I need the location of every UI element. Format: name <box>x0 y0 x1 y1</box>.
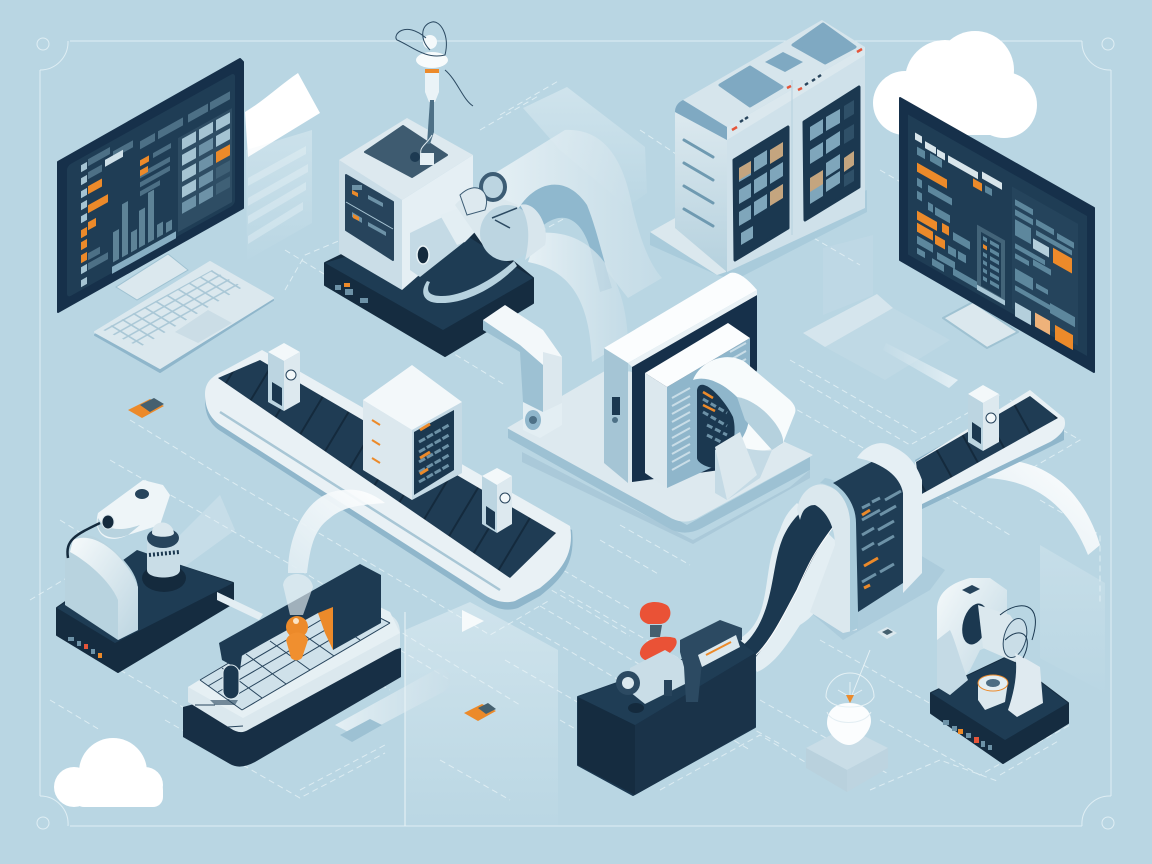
conveyor server <box>363 365 462 500</box>
right monitor <box>900 98 1094 372</box>
top centre machine <box>325 118 546 356</box>
dashed circuit paths <box>30 80 1100 800</box>
gantry <box>219 564 381 670</box>
scanner screen <box>697 385 735 470</box>
floating glass panel, right <box>803 235 958 388</box>
left monitor <box>58 59 243 312</box>
left conveyor <box>205 350 573 610</box>
machine body <box>339 160 402 290</box>
scanner arch <box>693 357 795 450</box>
cloud: top right <box>873 31 1037 138</box>
keyboard <box>95 262 273 372</box>
curved ramp <box>737 503 840 672</box>
machine base <box>325 205 533 356</box>
conveyor robots <box>268 343 512 533</box>
L-shaped arm <box>483 305 562 438</box>
side cylinder <box>410 212 463 277</box>
right conveyor with gate <box>737 385 1065 672</box>
small chips <box>128 398 897 742</box>
monitor stand <box>943 302 1018 348</box>
gate arches <box>797 484 857 633</box>
curved ribbon <box>288 490 385 573</box>
server base <box>650 190 867 280</box>
bottom right machine <box>931 578 1068 763</box>
3D printer bed <box>183 490 401 767</box>
translucent ribbons <box>160 87 1105 826</box>
cable connector <box>217 592 263 620</box>
bottom left robot <box>57 480 233 672</box>
bottom centre box with red robot <box>578 602 755 795</box>
overhead probe <box>396 22 473 165</box>
floating document <box>245 73 320 260</box>
conveyor robot <box>968 385 999 403</box>
scanner inner frame <box>645 373 667 488</box>
dome sensor <box>806 650 888 792</box>
red robot <box>640 602 670 624</box>
cloud: bottom left <box>54 738 163 807</box>
server towers <box>650 20 867 280</box>
gate shadow <box>810 555 945 640</box>
central scanner platform <box>508 273 812 544</box>
scanner outer frame <box>604 348 628 483</box>
play-button sheet <box>462 610 484 632</box>
centre panel <box>977 225 1005 306</box>
arm joints <box>455 193 518 255</box>
monitor stand <box>116 254 188 300</box>
